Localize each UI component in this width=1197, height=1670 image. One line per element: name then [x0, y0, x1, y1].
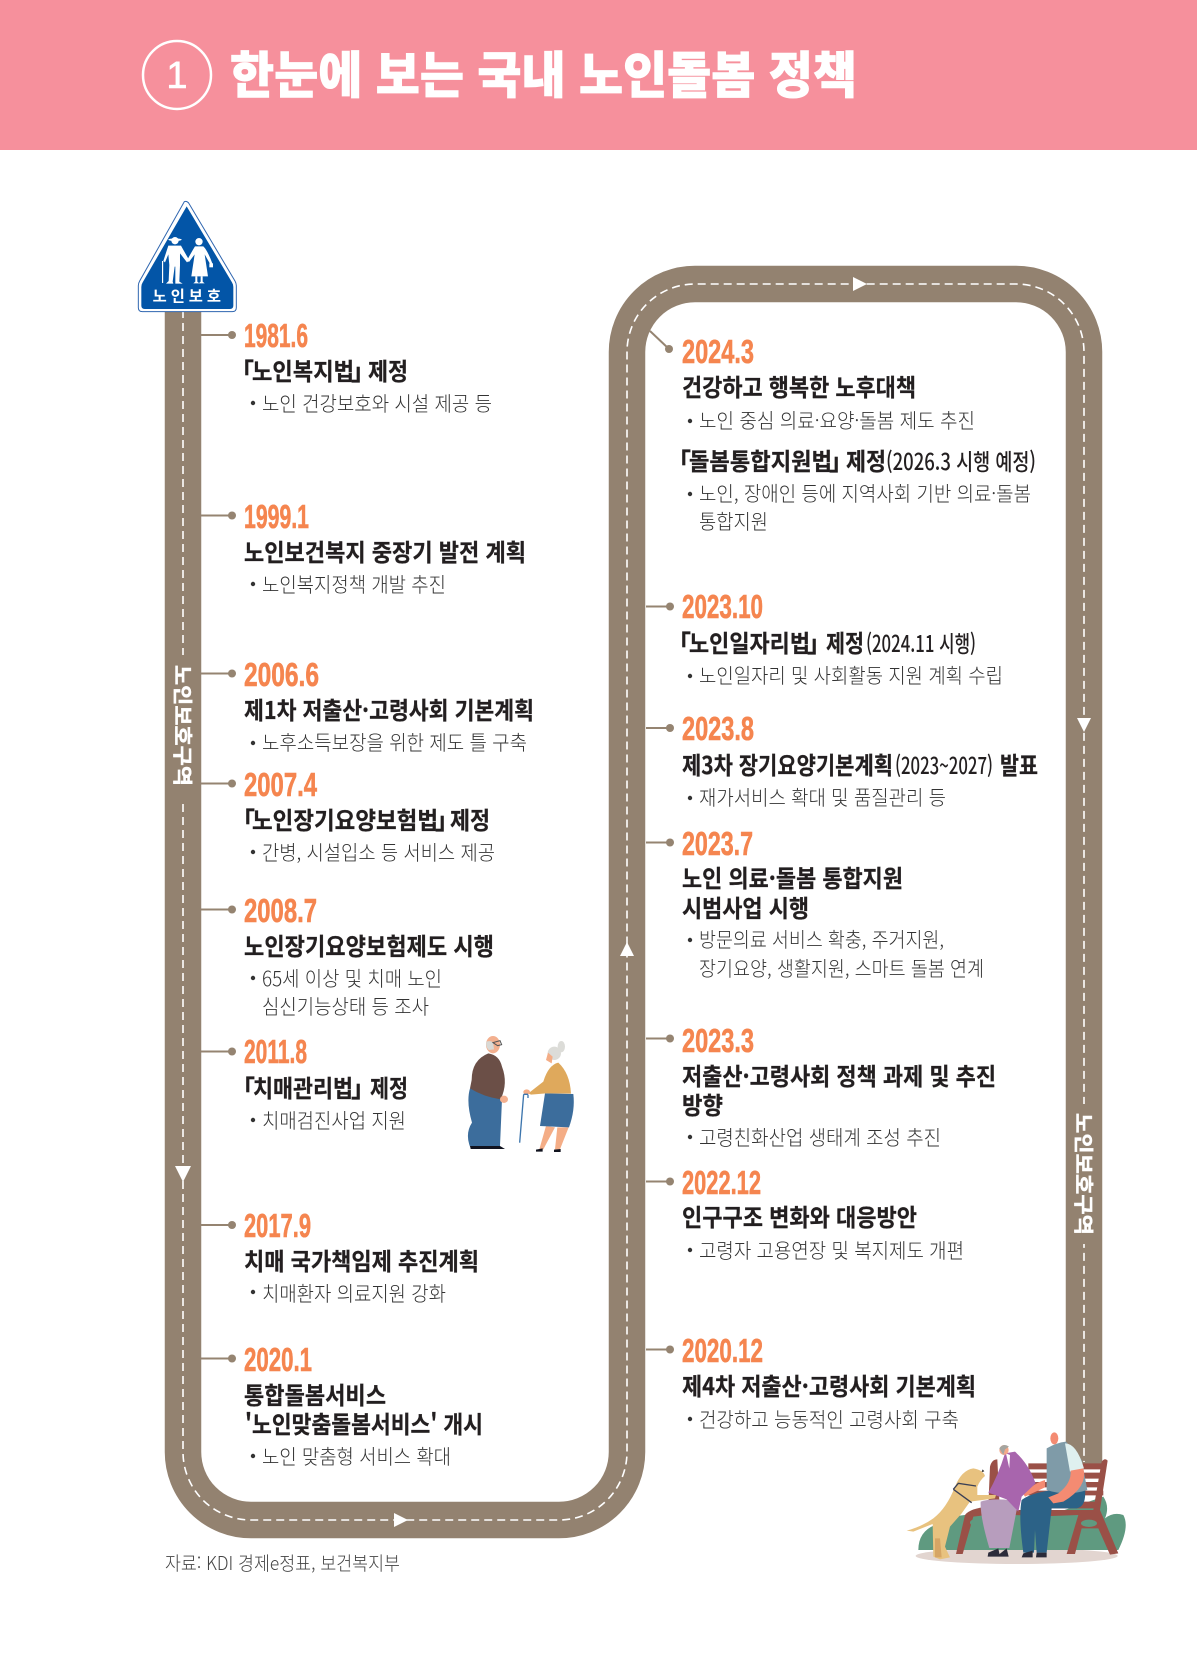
arrow: bottom road right — [394, 1513, 408, 1527]
man — [468, 1036, 508, 1149]
connector — [201, 1354, 236, 1362]
year: 2020.12 — [682, 1332, 763, 1369]
year: 2022.12 — [682, 1164, 761, 1201]
year: 2023.10 — [682, 588, 763, 625]
heading: care integration act: 「 — [667, 442, 691, 477]
heading: 제정 — [370, 1069, 408, 1104]
bullet text: 간병, 시설입소 등 서비스 제공 — [262, 836, 495, 866]
bullet text: 치매검진사업 지원 — [262, 1104, 406, 1134]
heading: 발표 — [1000, 746, 1038, 781]
year: 1981.6 — [244, 317, 308, 354]
road — [170, 284, 1097, 1520]
heading: 」 — [351, 352, 375, 387]
heading: 」 — [351, 1069, 375, 1104]
source note: 자료: KDI 경제e정표, 보건복지부 — [165, 1549, 400, 1576]
connector — [646, 838, 674, 846]
sign figures — [162, 237, 213, 284]
connector — [646, 602, 674, 610]
heading: 노인장기요양보험법 — [252, 801, 438, 836]
heading: 제3차 장기요양기본계획 — [682, 746, 893, 781]
heading: 제정 — [826, 624, 864, 659]
arrow: right road down — [1077, 718, 1091, 732]
sign text: 노인보호 — [153, 285, 221, 307]
heading: care integration act: 돌봄통합지원법 — [689, 442, 832, 477]
heading — [244, 1376, 483, 1440]
connector — [646, 1178, 674, 1186]
year: 2007.4 — [244, 766, 317, 803]
heading: 제정 — [368, 352, 408, 387]
connector — [201, 1221, 236, 1229]
connector — [650, 331, 673, 353]
heading: 제정 — [450, 801, 490, 836]
heading: 제4차 저출산·고령사회 기본계획 — [682, 1367, 976, 1402]
arrow: middle road up — [620, 942, 634, 956]
bullet text: 장기요양, 생활지원, 스마트 돌봄 연계 — [699, 952, 984, 982]
timeline item: 1981.6 — [201, 317, 492, 417]
bullet text: 노인, 장애인 등에 지역사회 기반 의료·돌봄 — [699, 477, 1031, 507]
road label: left: 노인보호구역 — [169, 665, 198, 786]
heading: 치매관리법 — [253, 1069, 353, 1104]
road label: right: 노인보호구역 — [1070, 1113, 1099, 1235]
heading: 노인일자리법 — [689, 624, 810, 659]
year: 2011.8 — [244, 1033, 307, 1070]
year: 1999.1 — [244, 498, 309, 535]
heading: 건강하고 행복한 노후대책 — [682, 368, 916, 403]
connector — [201, 331, 236, 339]
heading: '노인맞춤돌봄서비스' 개시 — [245, 1405, 483, 1440]
heading: 제1차 저출산·고령사회 기본계획 — [244, 691, 534, 726]
year: 2024.3 — [682, 333, 754, 370]
connector — [201, 906, 236, 914]
connector — [201, 512, 236, 520]
bullet text — [688, 923, 984, 982]
year: 2023.8 — [682, 710, 754, 747]
heading: 인구구조 변화와 대응방안 — [682, 1198, 917, 1233]
heading — [682, 859, 903, 924]
heading: 노인 의료·돌봄 통합지원 — [682, 859, 903, 894]
bullet text: 노인복지정책 개발 추진 — [262, 568, 446, 598]
heading: 시범사업 시행 — [682, 889, 809, 924]
heading — [230, 352, 408, 387]
connector — [646, 724, 674, 732]
heading: 저출산·고령사회 정책 과제 및 추진 — [682, 1057, 996, 1092]
year: 2008.7 — [244, 892, 317, 929]
heading: 」 — [435, 801, 459, 836]
connector — [646, 1034, 674, 1042]
timeline item: 2022.12 — [646, 1164, 964, 1264]
timeline item: 2023.3 — [646, 1022, 996, 1151]
bullet text: 통합지원 — [699, 505, 768, 535]
bullet text — [251, 962, 442, 1020]
heading — [667, 624, 976, 659]
year: 2020.1 — [244, 1341, 312, 1378]
title: 한눈에 보는 국내 노인돌봄 정책 — [230, 36, 857, 108]
timeline item: 2017.9 — [201, 1207, 479, 1307]
icon: senior protection road sign — [138, 201, 236, 312]
timeline item: 1999.1 — [201, 498, 526, 598]
connector — [201, 670, 236, 678]
man on bench — [1020, 1432, 1087, 1557]
heading: 」 — [807, 624, 831, 659]
heading: (2024.11 시행) — [866, 625, 976, 659]
number badge — [143, 41, 211, 109]
bullet text: 고령친화산업 생태계 조성 추진 — [699, 1121, 941, 1151]
bullet text — [688, 477, 1031, 535]
bullet text: 고령자 고용연장 및 복지제도 개편 — [699, 1234, 964, 1264]
year: 2017.9 — [244, 1207, 311, 1244]
illustration: elderly couple with cane — [468, 1036, 574, 1152]
woman — [523, 1041, 574, 1152]
heading: 「 — [231, 1069, 255, 1104]
heading — [682, 1057, 996, 1121]
bushes — [918, 1497, 1126, 1550]
timeline item: 2023.8 — [646, 710, 1038, 811]
number badge: 1 — [166, 55, 188, 97]
bullet text: 방문의료 서비스 확충, 주거지원, — [699, 923, 944, 953]
bullet text: 건강하고 능동적인 고령사회 구축 — [699, 1403, 959, 1433]
heading: 통합돌봄서비스 — [244, 1376, 386, 1411]
illustration: couple with dog on bench — [907, 1432, 1126, 1564]
heading — [682, 746, 1038, 781]
heading: care integration act: 」 — [829, 442, 853, 477]
timeline item: 2020.1 — [201, 1341, 483, 1470]
dog — [907, 1468, 996, 1559]
timeline item: 2011.8 — [201, 1033, 408, 1134]
woman on bench — [981, 1445, 1036, 1557]
timeline item: 2007.4 — [201, 766, 495, 866]
ground shadow — [916, 1548, 1118, 1564]
connector — [646, 1346, 674, 1354]
bullet text: 노후소득보장을 위한 제도 틀 구축 — [262, 726, 527, 756]
heading: 노인장기요양보험제도 시행 — [244, 927, 494, 962]
header banner — [0, 0, 1197, 150]
heading: care integration act: 제정 — [846, 442, 886, 477]
connector — [201, 1048, 236, 1056]
heading: 방향 — [682, 1086, 723, 1121]
heading: care integration act — [667, 442, 1036, 477]
heading: 「 — [667, 624, 691, 659]
heading: 「 — [230, 352, 254, 387]
timeline item: 2023.10 — [646, 588, 1003, 689]
heading — [231, 1069, 408, 1104]
timeline item: 2024.3 — [650, 331, 1036, 535]
bullet text: 노인 건강보호와 시설 제공 등 — [262, 387, 492, 417]
heading: (2023~2027) — [895, 747, 993, 781]
year: 2023.7 — [682, 825, 753, 862]
timeline item: 2008.7 — [201, 892, 494, 1020]
heading: 「 — [231, 801, 255, 836]
year: 2006.6 — [244, 656, 319, 693]
arrow: left road down — [175, 1166, 191, 1182]
bullet text: 치매환자 의료지원 강화 — [262, 1277, 446, 1307]
arrow: top road right — [853, 277, 867, 291]
heading: care integration act: (2026.3 시행 예정) — [886, 443, 1036, 477]
bullet text: 심신기능상태 등 조사 — [262, 990, 429, 1020]
year: 2023.3 — [682, 1022, 754, 1059]
bullet text: 65세 이상 및 치매 노인 — [262, 962, 442, 992]
bench — [956, 1459, 1118, 1555]
heading: 노인보건복지 중장기 발전 계획 — [244, 533, 526, 568]
connector — [201, 780, 236, 788]
bullet text: 노인일자리 및 사회활동 지원 계획 수립 — [699, 659, 1003, 689]
timeline item: 2020.12 — [646, 1332, 976, 1433]
bullet text: 노인 중심 의료·요양·돌봄 제도 추진 — [699, 404, 975, 434]
timeline item: 2006.6 — [201, 656, 534, 756]
bullet text: 재가서비스 확대 및 품질관리 등 — [699, 781, 946, 811]
heading: 노인복지법 — [252, 352, 354, 387]
bullet text: 노인 맞춤형 서비스 확대 — [262, 1440, 451, 1470]
timeline item: 2023.7 — [646, 825, 984, 982]
cane — [520, 1094, 528, 1143]
heading: 치매 국가책임제 추진계획 — [244, 1242, 479, 1277]
